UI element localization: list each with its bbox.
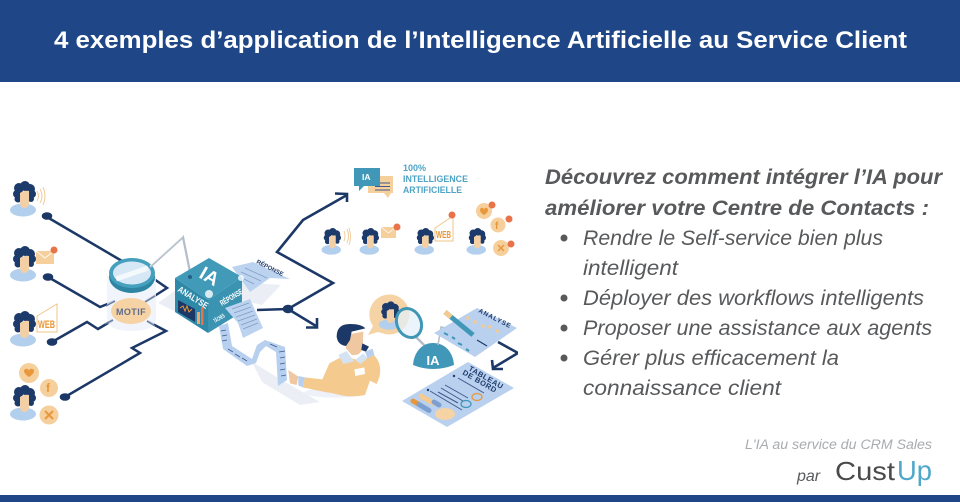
workflow arrow to agent xyxy=(284,306,317,328)
title: 4 exemples d’application de l’Intelligence Artificielle au Service Client xyxy=(54,27,907,54)
top row: email xyxy=(360,224,400,255)
paper: answer output xyxy=(225,299,263,338)
robotic arm xyxy=(150,236,191,277)
customer: web xyxy=(10,304,57,346)
top row: social xyxy=(466,202,514,256)
illustration xyxy=(10,163,518,427)
footer band xyxy=(0,495,960,502)
dashboard sheet: DE BORD xyxy=(461,368,499,395)
connector lines from customers to motif xyxy=(43,214,167,400)
workflow arrow to top row xyxy=(257,194,347,310)
customer: email xyxy=(10,246,58,282)
100% artificial intelligence label: ARTIFICIELLE xyxy=(403,185,462,195)
paper ribbon: tasks xyxy=(219,323,287,386)
agent on phone xyxy=(288,324,380,398)
100% artificial intelligence label: INTELLIGENCE xyxy=(403,174,468,184)
AI speech bubbles xyxy=(354,168,393,198)
bullet list: Gérer plus efficacement la xyxy=(583,346,839,370)
header band xyxy=(0,0,960,82)
top row: web: WEB xyxy=(436,230,451,241)
top row: social: f xyxy=(495,221,499,232)
paper: top answer sheet xyxy=(232,258,290,292)
bullet list: Proposer une assistance aux agents xyxy=(583,316,932,340)
analysis sheet: ANALYSE xyxy=(477,308,512,330)
bullet list: intelligent xyxy=(583,256,679,280)
dashboard sheet xyxy=(402,362,514,427)
tagline: L'IA au service du CRM Sales xyxy=(745,437,932,452)
logo signature: Cust xyxy=(835,456,896,486)
logo signature: par xyxy=(796,468,821,485)
customer: voice xyxy=(10,181,45,216)
AI cube: RÉPONSE xyxy=(218,287,245,308)
intro text: Découvrez comment intégrer l’IA pour xyxy=(545,165,944,189)
dashboard sheet: TABLEAU xyxy=(467,364,505,391)
bullet list: connaissance client xyxy=(583,376,782,400)
speech bubble with customer xyxy=(368,294,409,335)
customer: social: f xyxy=(46,381,51,395)
AI cube: ANALYSE xyxy=(176,284,210,311)
analysis lens with motif: MOTIF xyxy=(116,307,146,317)
customer: social xyxy=(10,363,58,424)
analysis lens with motif xyxy=(105,258,156,331)
paper shadows xyxy=(158,282,320,405)
customer: web: WEB xyxy=(38,319,55,331)
intro text xyxy=(545,165,944,220)
intro text: améliorer votre Centre de Contacts : xyxy=(545,196,929,220)
magnifier and AI dome: IA xyxy=(426,353,440,368)
logo signature xyxy=(796,455,932,486)
100% artificial intelligence label: 100% xyxy=(403,163,426,173)
AI cube: IA xyxy=(196,263,223,291)
logo signature: Up xyxy=(897,455,932,486)
top row: voice xyxy=(322,228,350,255)
arrow to dashboard xyxy=(492,342,518,369)
100% artificial intelligence label xyxy=(403,163,468,195)
analysis sheet xyxy=(434,308,517,357)
bullet list xyxy=(560,226,932,400)
paper: top answer sheet: RÉPONSE xyxy=(255,258,285,278)
bullet list: Rendre le Self-service bien plus xyxy=(583,226,883,250)
AI cube xyxy=(175,258,245,333)
magnifier and AI dome xyxy=(392,304,454,369)
bullet list: Déployer des workflows intelligents xyxy=(583,286,924,310)
AI speech bubbles: IA xyxy=(362,172,370,182)
AI cube: TÂCHES xyxy=(212,313,226,325)
top row: web xyxy=(414,212,456,255)
